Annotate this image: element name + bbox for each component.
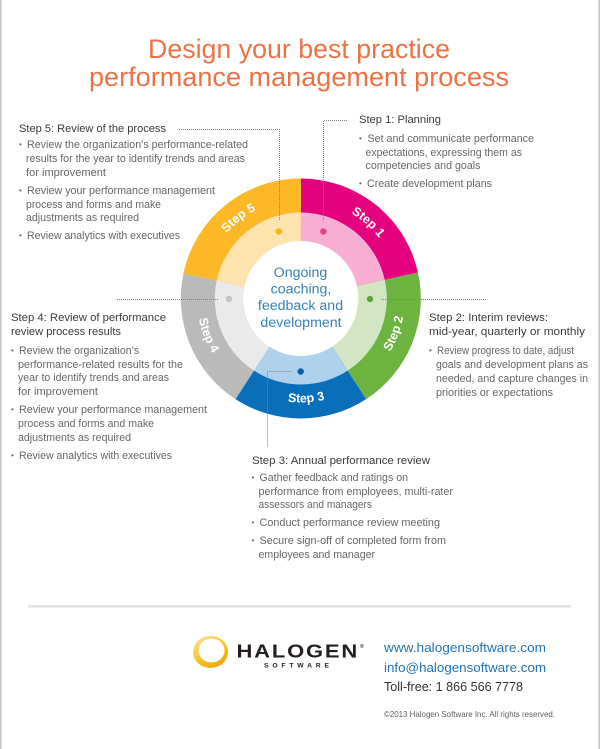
donut chart: five-step cycle — [180, 178, 421, 418]
panel: step 4 review of results: process and forms and make — [18, 418, 154, 430]
connector: step 1 — [320, 120, 348, 235]
panel: step 5 review of the process: • — [19, 186, 22, 195]
panel: step 3 annual performance review: • — [252, 518, 254, 527]
panel: step 3 annual performance review: • — [252, 473, 254, 482]
panel: step 4 review of results: Review the organization’s — [19, 345, 139, 357]
panel: step 4 review of results: Review your performance management — [19, 404, 207, 416]
connector: step 2 — [367, 296, 486, 302]
center text: development — [260, 315, 342, 331]
label: step 3: Step 3 — [288, 392, 324, 405]
center text: coaching, — [271, 282, 331, 298]
center circle — [243, 241, 358, 356]
logo: Halogen Software — [193, 636, 364, 670]
label: step 1: Step 1 — [352, 207, 384, 238]
panel: step 4 review of results: • — [11, 346, 14, 355]
center text: feedback and — [258, 298, 343, 314]
panel: step 3 annual performance review: Secure sign-off of completed form from — [260, 535, 446, 547]
title: Design your best practice — [148, 34, 450, 64]
panel: step 4 review of results: for improvement — [18, 386, 98, 398]
contact details: Toll-free: 1 866 566 7778 — [384, 679, 523, 694]
panel: step 3 annual performance review: Gather feedback and ratings on — [260, 472, 408, 484]
panel: step 4 review of results: • — [11, 405, 14, 414]
panel: step 2 interim reviews: needed, and capture changes in — [436, 373, 588, 385]
segment: step 3 — [235, 298, 366, 418]
segment: step 2 — [301, 273, 421, 399]
contact details: www.halogensoftware.com — [383, 640, 546, 655]
title: performance management process — [89, 62, 509, 92]
panel: step 5 review of the process: adjustments as required — [26, 212, 139, 224]
panel: step 4 review of results: • — [11, 451, 14, 460]
contact details: info@halogensoftware.com — [384, 660, 546, 675]
panel: step 2 interim reviews: priorities or expectations — [436, 387, 553, 399]
panel: step 3 annual performance review: • — [252, 536, 254, 545]
segment: step 1 — [301, 178, 418, 298]
panel: step 3 annual performance review — [252, 455, 453, 561]
panel: step 5 review of the process — [19, 123, 248, 242]
icon: gold ring — [193, 636, 228, 668]
panel: step 3 annual performance review: Conduct performance review meeting — [260, 517, 440, 529]
panel: step 3 annual performance review: employees and manager — [258, 549, 375, 561]
panel: step 4 review of results: performance-related results for the — [18, 359, 183, 371]
panel: step 4 review of results: adjustments as required — [18, 432, 131, 444]
panel: step 5 review of the process: Review the organization’s performance-related — [27, 139, 248, 151]
panel: step 2 interim reviews: • — [429, 346, 432, 355]
panel: step 1 planning: Create development plans — [367, 178, 492, 190]
panel: step 2 interim reviews — [429, 312, 588, 399]
panel: step 4 review of results: Step 4: Review of performance — [11, 312, 166, 324]
segment: step 5 — [183, 178, 301, 298]
center text — [258, 265, 343, 331]
panel: step 2 interim reviews: goals and development plans as — [436, 359, 588, 371]
connector: step 5 — [179, 130, 282, 235]
panel: step 1 planning: competencies and goals — [366, 160, 480, 172]
panel: step 1 planning: • — [359, 179, 362, 188]
label: step 4: Step 4 — [199, 318, 220, 352]
panel: step 1 planning: expectations, expressing them as — [366, 147, 522, 159]
panel: step 1 planning: Step 1: Planning — [359, 114, 441, 126]
label: step 5: Step 5 — [222, 203, 255, 232]
logo: Halogen Software: HALOGEN — [236, 641, 359, 662]
connector: step 4 — [117, 296, 232, 302]
title — [89, 34, 509, 92]
panel: step 1 planning: Set and communicate performance — [368, 133, 534, 145]
panel: step 4 review of results: Review analytics with executives — [19, 450, 172, 462]
connector: step 3 — [268, 368, 304, 447]
panel: step 1 planning: • — [359, 134, 362, 143]
panel: step 3 annual performance review: Step 3: Annual performance review — [252, 455, 431, 467]
panel: step 2 interim reviews: Review progress to date, adjust — [437, 345, 574, 357]
segment: step 4 — [181, 274, 301, 399]
panel: step 5 review of the process: • — [19, 140, 22, 149]
logo: Halogen Software: ® — [360, 643, 364, 650]
panel: step 2 interim reviews: mid-year, quarterly or monthly — [429, 326, 585, 338]
panel: step 5 review of the process: • — [19, 231, 22, 240]
panel: step 5 review of the process: results for the year to identify trends and areas — [26, 153, 245, 165]
panel: step 4 review of results: review process results — [11, 326, 121, 338]
panel: step 4 review of results: year to identify trends and areas — [18, 372, 169, 384]
copyright: ©2013 Halogen Software Inc. All rights reserved. — [384, 710, 555, 719]
panel: step 5 review of the process: Review analytics with executives — [27, 230, 180, 242]
panel: step 5 review of the process: Review your performance management — [27, 185, 215, 197]
panel: step 2 interim reviews: Step 2: Interim reviews: — [429, 312, 548, 324]
panel: step 5 review of the process: Step 5: Review of the process — [19, 123, 166, 135]
label: step 2: Step 2 — [384, 316, 404, 351]
contact details — [383, 640, 546, 694]
panel: step 3 annual performance review: performance from employees, multi-rater — [258, 486, 453, 498]
panel: step 4 review of results — [11, 312, 207, 462]
logo: Halogen Software: SOFTWARE — [264, 663, 329, 670]
panel: step 1 planning — [359, 114, 534, 190]
panel: step 5 review of the process: for improvement — [26, 167, 106, 179]
panel: step 3 annual performance review: assessors and managers — [258, 499, 372, 511]
center text: Ongoing — [274, 265, 327, 281]
panel: step 5 review of the process: process and forms and make — [26, 199, 161, 211]
